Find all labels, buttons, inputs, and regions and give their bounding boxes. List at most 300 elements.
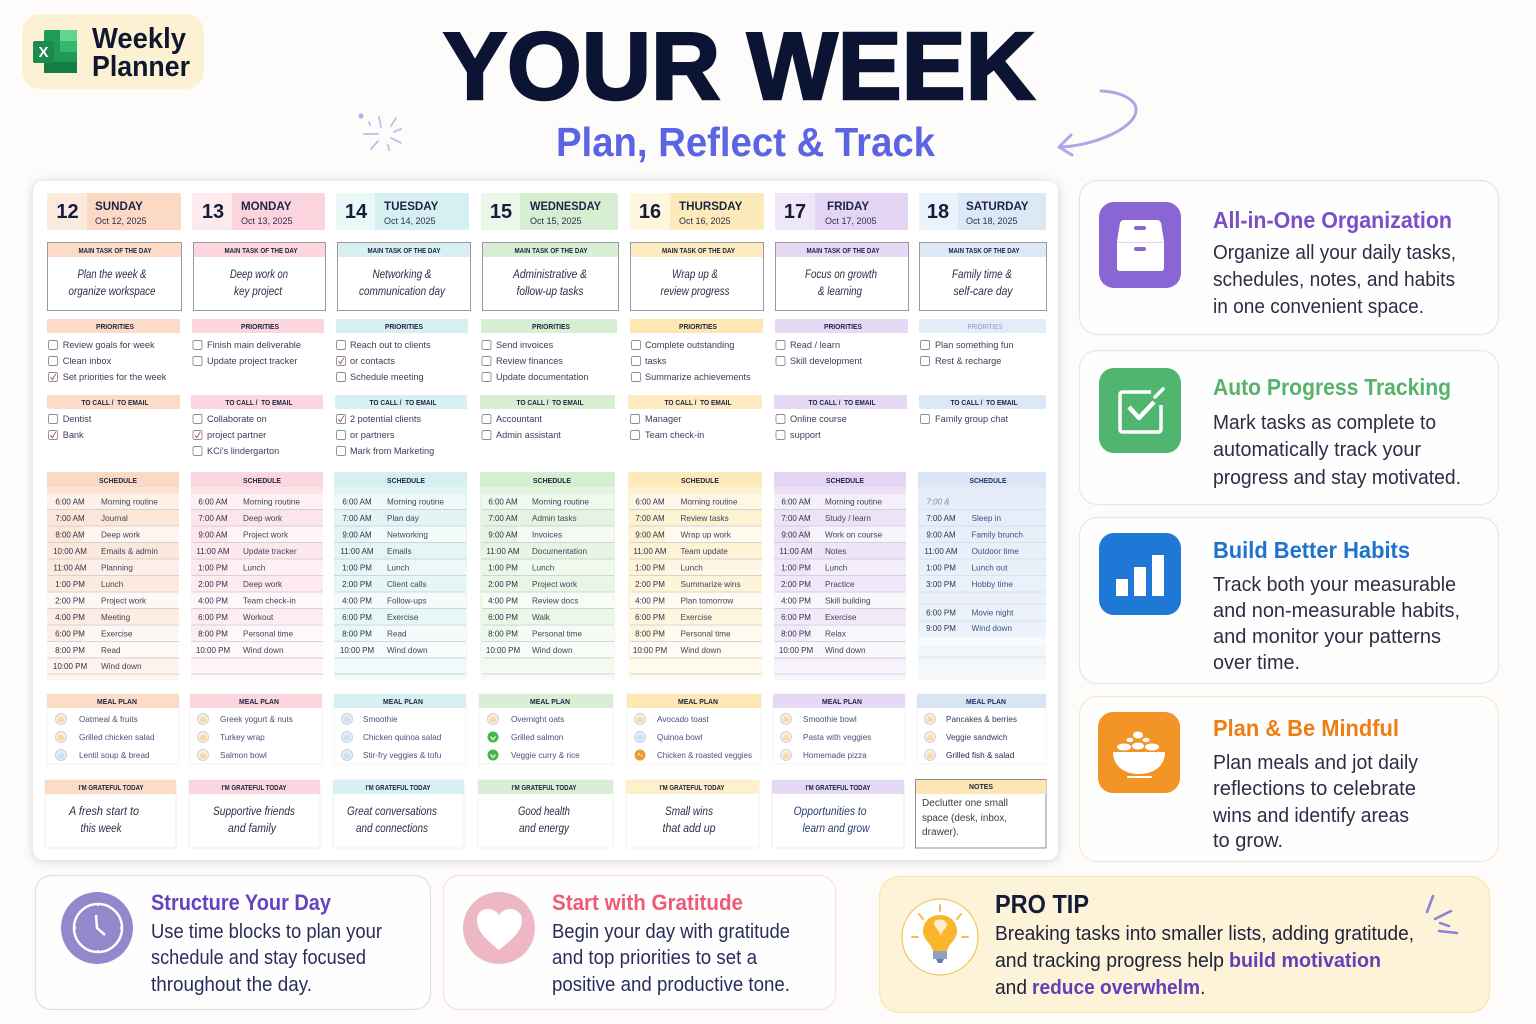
gratitude: Monday: and family bbox=[228, 823, 277, 835]
schedule: Tuesday: Plan day bbox=[387, 514, 420, 523]
day header: Sunday: 12 bbox=[56, 201, 79, 223]
schedule: Sunday: Planning bbox=[101, 564, 133, 572]
schedule: Saturday: Outdoor time bbox=[972, 547, 1019, 556]
schedule: Thursday: Lunch bbox=[680, 564, 703, 572]
schedule: Tuesday: Emails bbox=[387, 547, 412, 556]
panel: Start with Gratitude: positive and productive tone. bbox=[552, 974, 790, 996]
panel: Auto Progress Tracking: automatically track your bbox=[1213, 439, 1421, 461]
schedule: Sunday: 2:00 PM bbox=[55, 596, 85, 606]
schedule: Thursday: Wind down bbox=[680, 646, 721, 655]
schedule: Sunday: Read bbox=[101, 646, 121, 655]
schedule: Wednesday: Invoices bbox=[532, 530, 562, 540]
schedule: Friday: 6:00 AM bbox=[781, 498, 811, 506]
panel: Plan & Be Mindful: to grow. bbox=[1213, 830, 1283, 852]
schedule: Sunday: Project work bbox=[101, 596, 147, 606]
panel: Plan & Be Mindful: reflections to celebrate bbox=[1213, 778, 1416, 800]
schedule: Friday: 7:00 AM bbox=[781, 514, 811, 523]
main task: Saturday: self-care day bbox=[954, 286, 1014, 298]
main task: Monday: key project bbox=[234, 286, 283, 298]
schedule: Sunday: 10:00 PM bbox=[53, 662, 87, 671]
main task: Sunday: Plan the week & bbox=[78, 269, 147, 281]
schedule: Friday: Work on course bbox=[825, 530, 883, 540]
day column: Wednesday bbox=[478, 193, 618, 848]
to call / to email: Saturday bbox=[919, 395, 1046, 424]
panel: All-in-One Organization: Organize all your daily tasks, bbox=[1213, 242, 1456, 264]
priorities: Sunday: Set priorities for the week bbox=[63, 372, 167, 382]
schedule: Wednesday bbox=[480, 472, 615, 680]
schedule: Thursday: 6:00 AM bbox=[635, 498, 665, 506]
schedule: Wednesday: Review docs bbox=[532, 596, 578, 606]
schedule: Monday: 6:00 AM bbox=[198, 498, 228, 506]
notes: space (desk, inbox, bbox=[922, 813, 1007, 824]
schedule: Friday: 4:00 PM bbox=[781, 596, 811, 606]
schedule: Friday: Exercise bbox=[825, 613, 857, 622]
schedule: Wednesday: 6:00 AM bbox=[488, 498, 518, 506]
day header: Friday: FRIDAY bbox=[827, 200, 869, 213]
panel: Auto Progress Tracking: progress and stay motivated. bbox=[1213, 467, 1461, 489]
priorities: Thursday bbox=[630, 319, 763, 382]
schedule: Thursday: Plan tomorrow bbox=[680, 596, 733, 606]
panel: Build Better Habits: over time. bbox=[1213, 652, 1300, 674]
schedule: Friday: 10:00 PM bbox=[779, 646, 813, 655]
panel: Build Better Habits: Track both your measurable bbox=[1213, 574, 1456, 596]
day header: Monday: MONDAY bbox=[241, 200, 292, 213]
schedule: Saturday: SCHEDULE bbox=[970, 478, 1007, 485]
priorities: Friday: Read / learn bbox=[790, 340, 840, 350]
schedule: Thursday: 6:00 PM bbox=[635, 613, 665, 622]
schedule: Thursday: Personal time bbox=[680, 630, 731, 638]
schedule: Monday: 7:00 AM bbox=[198, 514, 228, 523]
meal plan: Friday: Pasta with veggies bbox=[803, 733, 871, 742]
schedule: Wednesday: 1:00 PM bbox=[488, 564, 518, 572]
icon: food bowl bbox=[1098, 712, 1180, 793]
main task: Wednesday: Administrative & bbox=[512, 269, 587, 281]
schedule: Monday: Wind down bbox=[243, 646, 284, 655]
main task: Thursday: MAIN TASK OF THE DAY bbox=[662, 248, 735, 255]
gratitude: Wednesday: and energy bbox=[519, 823, 570, 835]
schedule: Saturday: 11:00 AM bbox=[924, 547, 958, 556]
priorities: Thursday: tasks bbox=[645, 356, 667, 366]
main task: Thursday bbox=[630, 242, 764, 310]
meal plan: Monday bbox=[190, 694, 322, 764]
panel: Start with Gratitude: Begin your day with gratitude bbox=[552, 921, 790, 943]
schedule: Wednesday: Walk bbox=[532, 613, 551, 622]
priorities: Saturday: Plan something fun bbox=[935, 340, 1014, 350]
schedule: Wednesday: 2:00 PM bbox=[488, 580, 518, 589]
schedule: Sunday: Lunch bbox=[101, 580, 124, 589]
main task: Friday: & learning bbox=[818, 286, 863, 298]
schedule: Thursday: SCHEDULE bbox=[681, 478, 719, 485]
arrow bbox=[1059, 91, 1136, 155]
to call / to email: Tuesday: TO CALL / TO EMAIL bbox=[370, 400, 437, 407]
gratitude: Friday bbox=[772, 780, 904, 848]
to call / to email: Monday: project partner bbox=[207, 430, 266, 440]
schedule: Friday: Lunch bbox=[825, 564, 848, 572]
main task: Sunday bbox=[48, 242, 182, 310]
icon: bar chart bbox=[1099, 533, 1181, 615]
schedule: Tuesday: 10:00 PM bbox=[340, 646, 374, 655]
schedule: Saturday: 7:00 & bbox=[926, 498, 950, 506]
schedule: Sunday: 4:00 PM bbox=[55, 613, 85, 622]
schedule: Friday: Relax bbox=[825, 630, 846, 638]
schedule: Wednesday: Project work bbox=[532, 580, 578, 589]
to call / to email: Tuesday: Mark from Marketing bbox=[350, 446, 434, 456]
schedule: Sunday: 7:00 AM bbox=[55, 514, 85, 523]
schedule: Saturday: 9:00 PM bbox=[926, 624, 956, 633]
schedule: Friday: 6:00 PM bbox=[781, 613, 811, 622]
schedule: Thursday: 9:00 AM bbox=[635, 530, 665, 540]
gratitude: Tuesday: I'M GRATEFUL TODAY bbox=[366, 785, 431, 792]
gratitude: Wednesday: I'M GRATEFUL TODAY bbox=[512, 785, 577, 792]
priorities: Tuesday: PRIORITIES bbox=[385, 324, 423, 331]
schedule: Sunday: Exercise bbox=[101, 630, 133, 638]
main task: Friday: Focus on growth bbox=[805, 269, 877, 281]
schedule: Tuesday: Morning routine bbox=[387, 498, 444, 506]
icon: sparkle burst bbox=[358, 114, 401, 150]
meal plan: Tuesday: Smoothie bbox=[363, 715, 398, 724]
schedule: Sunday: Morning routine bbox=[101, 498, 158, 506]
schedule: Saturday: 7:00 AM bbox=[926, 514, 956, 523]
schedule: Sunday: 1:00 PM bbox=[55, 580, 85, 589]
to call / to email: Sunday: Bank bbox=[63, 430, 84, 440]
schedule: Sunday: 11:00 AM bbox=[53, 564, 87, 572]
schedule: Monday: 1:00 PM bbox=[198, 564, 228, 572]
day header: Tuesday bbox=[336, 193, 469, 230]
day column: Thursday bbox=[626, 193, 764, 848]
schedule: Tuesday: 2:00 PM bbox=[342, 580, 372, 589]
to call / to email: Saturday: Family group chat bbox=[935, 414, 1008, 424]
notes: Declutter one small bbox=[922, 798, 1008, 809]
panel: Pro Tip: PRO TIP bbox=[995, 889, 1089, 919]
schedule: Friday: Study / learn bbox=[825, 514, 871, 523]
schedule: Thursday: Review tasks bbox=[680, 514, 729, 523]
main task: Friday: MAIN TASK OF THE DAY bbox=[806, 248, 880, 255]
main task: Wednesday bbox=[482, 242, 618, 310]
main task: Sunday: organize workspace bbox=[68, 286, 156, 298]
schedule: Thursday: Morning routine bbox=[680, 498, 738, 506]
schedule: Friday: 1:00 PM bbox=[781, 564, 811, 572]
gratitude: Wednesday bbox=[478, 780, 613, 848]
priorities: Sunday: Clean inbox bbox=[63, 356, 112, 366]
gratitude: Tuesday bbox=[333, 780, 464, 848]
schedule: Thursday: 1:00 PM bbox=[635, 564, 665, 572]
schedule: Sunday: 6:00 AM bbox=[55, 498, 85, 506]
gratitude: Thursday: Small wins bbox=[665, 806, 713, 818]
meal plan: Tuesday: Chicken quinoa salad bbox=[363, 733, 442, 742]
priorities: Wednesday: Update documentation bbox=[496, 372, 588, 382]
meal plan: Wednesday: Veggie curry & rice bbox=[511, 751, 580, 760]
schedule: Wednesday: 7:00 AM bbox=[488, 514, 518, 523]
notes bbox=[916, 780, 1046, 848]
priorities: Sunday: PRIORITIES bbox=[96, 324, 134, 331]
day header: Friday bbox=[775, 193, 908, 230]
main task: Friday bbox=[776, 242, 908, 310]
schedule: Wednesday: 9:00 AM bbox=[488, 530, 518, 540]
day header: Friday: Oct 17, 2005 bbox=[825, 216, 877, 226]
schedule: Tuesday: Client calls bbox=[387, 580, 427, 589]
panel: Plan & Be Mindful: wins and identify areas bbox=[1212, 805, 1409, 827]
priorities: Monday: PRIORITIES bbox=[241, 324, 279, 331]
day header: Sunday: SUNDAY bbox=[95, 200, 143, 213]
meal plan: Wednesday bbox=[479, 694, 613, 764]
main task: Saturday: MAIN TASK OF THE DAY bbox=[948, 248, 1020, 255]
to call / to email: Wednesday: TO CALL / TO EMAIL bbox=[516, 400, 584, 407]
main task: Saturday: Family time & bbox=[952, 269, 1012, 281]
schedule: Thursday: 8:00 PM bbox=[635, 630, 665, 638]
main task: Wednesday: follow-up tasks bbox=[516, 286, 584, 298]
panel: Structure Your Day: Structure Your Day bbox=[151, 890, 332, 915]
schedule: Friday: 2:00 PM bbox=[781, 580, 811, 589]
notes: NOTES bbox=[969, 784, 993, 791]
main task: Thursday: review progress bbox=[660, 286, 730, 298]
to call / to email: Tuesday bbox=[335, 395, 467, 456]
gratitude: Friday: I'M GRATEFUL TODAY bbox=[806, 785, 871, 792]
main task: Sunday: MAIN TASK OF THE DAY bbox=[78, 248, 152, 255]
schedule: Monday: 10:00 PM bbox=[196, 646, 230, 655]
day header: Friday: 17 bbox=[784, 201, 806, 223]
day header: Thursday: 16 bbox=[639, 201, 661, 223]
schedule: Thursday: Exercise bbox=[680, 613, 712, 622]
to call / to email: Tuesday: or partners bbox=[350, 430, 395, 440]
to call / to email: Wednesday: Accountant bbox=[496, 414, 542, 424]
schedule: Monday: Lunch bbox=[243, 564, 266, 572]
schedule: Thursday bbox=[628, 472, 762, 680]
day header: Wednesday: WEDNESDAY bbox=[530, 200, 601, 213]
day header: Thursday: Oct 16, 2025 bbox=[679, 216, 731, 226]
day header: Thursday bbox=[630, 193, 764, 230]
meal plan: Saturday bbox=[917, 694, 1046, 764]
priorities: Sunday bbox=[47, 319, 180, 382]
to call / to email: Monday: KCi's lindergarton bbox=[207, 446, 279, 456]
schedule: Thursday: Summarize wins bbox=[680, 580, 741, 589]
schedule: Sunday: SCHEDULE bbox=[99, 478, 137, 485]
schedule: Friday: Wind down bbox=[825, 646, 866, 655]
meal plan: Thursday bbox=[627, 694, 761, 764]
icon: spreadsheet app: X bbox=[38, 44, 49, 61]
meal plan: Monday: Salmon bowl bbox=[220, 751, 267, 760]
gratitude: Friday: Opportunities to bbox=[794, 806, 867, 818]
priorities: Monday bbox=[192, 319, 324, 366]
meal plan: Friday: MEAL PLAN bbox=[822, 699, 862, 706]
gratitude: Sunday: A fresh start to bbox=[68, 806, 140, 818]
badge: Weekly Planner: Planner bbox=[92, 51, 190, 83]
priorities: Wednesday bbox=[481, 319, 617, 382]
meal plan: Saturday: Grilled fish & salad bbox=[946, 751, 1015, 760]
schedule: Saturday: 6:00 PM bbox=[926, 608, 956, 618]
gratitude: Tuesday: and connections bbox=[356, 823, 428, 835]
panel: Build Better Habits: and non-measurable habits, bbox=[1213, 600, 1460, 622]
to call / to email: Friday: support bbox=[790, 430, 821, 440]
schedule: Wednesday: Personal time bbox=[532, 630, 583, 638]
panel: Plan & Be Mindful: Plan & Be Mindful bbox=[1213, 715, 1399, 741]
priorities: Saturday bbox=[919, 319, 1046, 366]
meal plan: Saturday: Veggie sandwich bbox=[946, 733, 1008, 742]
schedule: Tuesday: 4:00 PM bbox=[342, 596, 372, 606]
day column: Monday bbox=[189, 193, 326, 848]
gratitude: Thursday: I'M GRATEFUL TODAY bbox=[660, 785, 725, 792]
to call / to email: Monday: Collaborate on bbox=[207, 414, 267, 424]
main task: Monday: Deep work on bbox=[230, 269, 288, 281]
schedule: Wednesday: 11:00 AM bbox=[486, 547, 520, 556]
meal plan: Wednesday: Grilled salmon bbox=[511, 733, 564, 742]
to call / to email: Sunday: TO CALL / TO EMAIL bbox=[82, 400, 149, 407]
gratitude: Monday: I'M GRATEFUL TODAY bbox=[222, 785, 287, 792]
meal plan: Tuesday: MEAL PLAN bbox=[383, 699, 423, 706]
priorities: Monday: Update project tracker bbox=[207, 356, 297, 366]
panel: Pro Tip: . bbox=[1200, 977, 1206, 999]
schedule: Saturday: 9:00 AM bbox=[926, 530, 956, 540]
schedule: Tuesday: Follow-ups bbox=[387, 596, 427, 606]
schedule: Monday: Morning routine bbox=[243, 498, 300, 506]
schedule: Tuesday: SCHEDULE bbox=[387, 478, 425, 485]
icon: spreadsheet app bbox=[33, 30, 77, 73]
schedule: Wednesday: 10:00 PM bbox=[486, 646, 520, 655]
schedule: Monday: Project work bbox=[243, 530, 289, 540]
to call / to email: Wednesday bbox=[480, 395, 615, 440]
day header: Wednesday bbox=[481, 193, 618, 230]
schedule: Wednesday: Admin tasks bbox=[532, 514, 577, 523]
gratitude: Thursday: that add up bbox=[662, 823, 716, 835]
schedule: Saturday: Family brunch bbox=[972, 530, 1023, 540]
meal plan: Wednesday: Overnight oats bbox=[511, 715, 564, 724]
schedule: Saturday: 1:00 PM bbox=[926, 564, 956, 572]
icon: light bulb bbox=[902, 899, 978, 975]
schedule: Friday: Morning routine bbox=[825, 498, 882, 506]
schedule: Saturday: Movie night bbox=[972, 608, 1014, 618]
day header: Monday: 13 bbox=[202, 201, 224, 223]
to call / to email: Thursday bbox=[628, 395, 762, 440]
schedule: Wednesday: Documentation bbox=[532, 547, 588, 556]
day header: Tuesday: Oct 14, 2025 bbox=[384, 216, 436, 226]
meal plan: Sunday: Grilled chicken salad bbox=[79, 733, 155, 742]
panel: Start with Gratitude: and top priorities to set a bbox=[552, 947, 758, 969]
schedule: Thursday: 4:00 PM bbox=[635, 596, 665, 606]
schedule: Sunday: Wind down bbox=[101, 662, 142, 671]
meal plan: Tuesday: Stir-fry veggies & tofu bbox=[363, 751, 442, 760]
meal plan: Friday bbox=[773, 694, 905, 764]
schedule: Tuesday: 6:00 AM bbox=[342, 498, 372, 506]
to call / to email: Friday bbox=[774, 395, 907, 440]
meal plan: Monday: Turkey wrap bbox=[220, 733, 265, 742]
schedule: Tuesday: 8:00 PM bbox=[342, 630, 372, 638]
schedule: Friday: SCHEDULE bbox=[826, 478, 864, 485]
gratitude: Sunday: this week bbox=[80, 823, 123, 835]
schedule: Monday: Personal time bbox=[243, 630, 294, 638]
panel: Start with Gratitude: Start with Gratitude bbox=[552, 890, 743, 915]
schedule: Monday: Deep work bbox=[243, 580, 283, 589]
to call / to email: Thursday: Team check-in bbox=[645, 430, 704, 440]
schedule: Friday: 8:00 PM bbox=[781, 630, 811, 638]
schedule: Saturday bbox=[918, 472, 1046, 680]
schedule: Tuesday: 6:00 PM bbox=[342, 613, 372, 622]
schedule: Thursday: 11:00 AM bbox=[633, 547, 667, 556]
day header: Sunday: Oct 12, 2025 bbox=[95, 216, 147, 226]
meal plan: Tuesday bbox=[334, 694, 466, 764]
panel: Plan & Be Mindful: Plan meals and jot daily bbox=[1213, 752, 1418, 774]
schedule: Thursday: 7:00 AM bbox=[635, 514, 665, 523]
schedule: Wednesday: Morning routine bbox=[532, 498, 589, 506]
day header: Monday bbox=[192, 193, 325, 230]
schedule: Monday: Workout bbox=[243, 613, 274, 622]
panel: Structure Your Day bbox=[36, 876, 430, 1010]
panel: Structure Your Day: schedule and stay focused bbox=[151, 947, 366, 969]
icon: clock bbox=[61, 892, 133, 964]
schedule: Friday: Skill building bbox=[825, 596, 871, 606]
schedule: Monday bbox=[191, 472, 323, 680]
icon: storage drawers bbox=[1099, 202, 1181, 288]
priorities: Friday: PRIORITIES bbox=[824, 324, 862, 331]
meal plan: Thursday: Quinoa bowl bbox=[657, 733, 703, 742]
priorities: Thursday: PRIORITIES bbox=[679, 324, 717, 331]
schedule: Tuesday: Lunch bbox=[387, 564, 410, 572]
gratitude: Thursday bbox=[626, 780, 759, 848]
panel: Build Better Habits: Build Better Habits bbox=[1213, 537, 1410, 563]
day header: Wednesday: Oct 15, 2025 bbox=[530, 216, 582, 226]
priorities: Sunday: Review goals for week bbox=[63, 340, 155, 350]
schedule: Tuesday: Wind down bbox=[387, 646, 428, 655]
meal plan: Friday: Homemade pizza bbox=[803, 751, 867, 760]
schedule: Saturday: Hobby time bbox=[972, 580, 1013, 589]
panel: Build Better Habits bbox=[1080, 518, 1498, 684]
day header: Tuesday: TUESDAY bbox=[384, 200, 439, 213]
gratitude: Tuesday: Great conversations bbox=[347, 806, 437, 818]
schedule: Wednesday: Lunch bbox=[532, 564, 555, 572]
priorities: Thursday: Complete outstanding bbox=[645, 340, 734, 350]
panel: All-in-One Organization: schedules, notes, and habits bbox=[1213, 269, 1455, 291]
priorities: Tuesday: Schedule meeting bbox=[350, 372, 424, 382]
gratitude: Sunday bbox=[45, 780, 176, 848]
schedule: Tuesday: 7:00 AM bbox=[342, 514, 372, 523]
panel: All-in-One Organization: All-in-One Organization bbox=[1213, 207, 1452, 233]
main task: Tuesday bbox=[338, 242, 470, 310]
main task: Tuesday: MAIN TASK OF THE DAY bbox=[368, 248, 441, 255]
icon: checked box bbox=[1099, 368, 1181, 453]
day header: Saturday: 18 bbox=[927, 201, 949, 223]
schedule: Tuesday: 9:00 AM bbox=[342, 530, 372, 540]
schedule: Monday: 8:00 PM bbox=[198, 630, 228, 638]
day column: Tuesday bbox=[333, 193, 470, 848]
panel: Auto Progress Tracking: Mark tasks as complete to bbox=[1213, 412, 1436, 434]
schedule: Friday: Notes bbox=[825, 547, 846, 556]
gratitude: Sunday: I'M GRATEFUL TODAY bbox=[78, 785, 144, 792]
priorities: Tuesday bbox=[336, 319, 468, 382]
day column: Sunday bbox=[45, 193, 182, 848]
panel: Pro Tip: and tracking progress help bbox=[995, 950, 1224, 972]
panel: weekly planner board bbox=[33, 181, 1058, 860]
meal plan: Monday: Greek yogurt & nuts bbox=[220, 715, 293, 724]
meal plan: Thursday: Avocado toast bbox=[657, 715, 709, 724]
day header: Sunday bbox=[47, 193, 181, 230]
schedule: Monday: SCHEDULE bbox=[243, 478, 281, 485]
schedule: Friday: Practice bbox=[825, 580, 855, 589]
meal plan: Thursday: Chicken & roasted veggies bbox=[657, 751, 752, 760]
meal plan: Sunday bbox=[47, 694, 179, 764]
schedule: Monday: Team check-in bbox=[243, 596, 296, 606]
priorities: Saturday: PRIORITIES bbox=[968, 324, 1003, 331]
schedule: Tuesday: 11:00 AM bbox=[340, 547, 374, 556]
panel: Pro Tip: Breaking tasks into smaller lists, adding gratitude, bbox=[995, 923, 1414, 945]
panel: Plan & Be Mindful bbox=[1080, 696, 1498, 862]
panel: Pro Tip bbox=[880, 876, 1490, 1012]
schedule: Sunday: 8:00 AM bbox=[55, 530, 85, 540]
priorities: Wednesday: PRIORITIES bbox=[532, 324, 570, 331]
schedule: Wednesday: Wind down bbox=[532, 646, 573, 655]
schedule: Tuesday: Exercise bbox=[387, 613, 419, 622]
schedule: Wednesday: 4:00 PM bbox=[488, 596, 518, 606]
to call / to email: Sunday bbox=[47, 395, 180, 440]
to call / to email: Tuesday: 2 potential clients bbox=[350, 414, 421, 424]
to call / to email: Wednesday: Admin assistant bbox=[496, 430, 561, 440]
